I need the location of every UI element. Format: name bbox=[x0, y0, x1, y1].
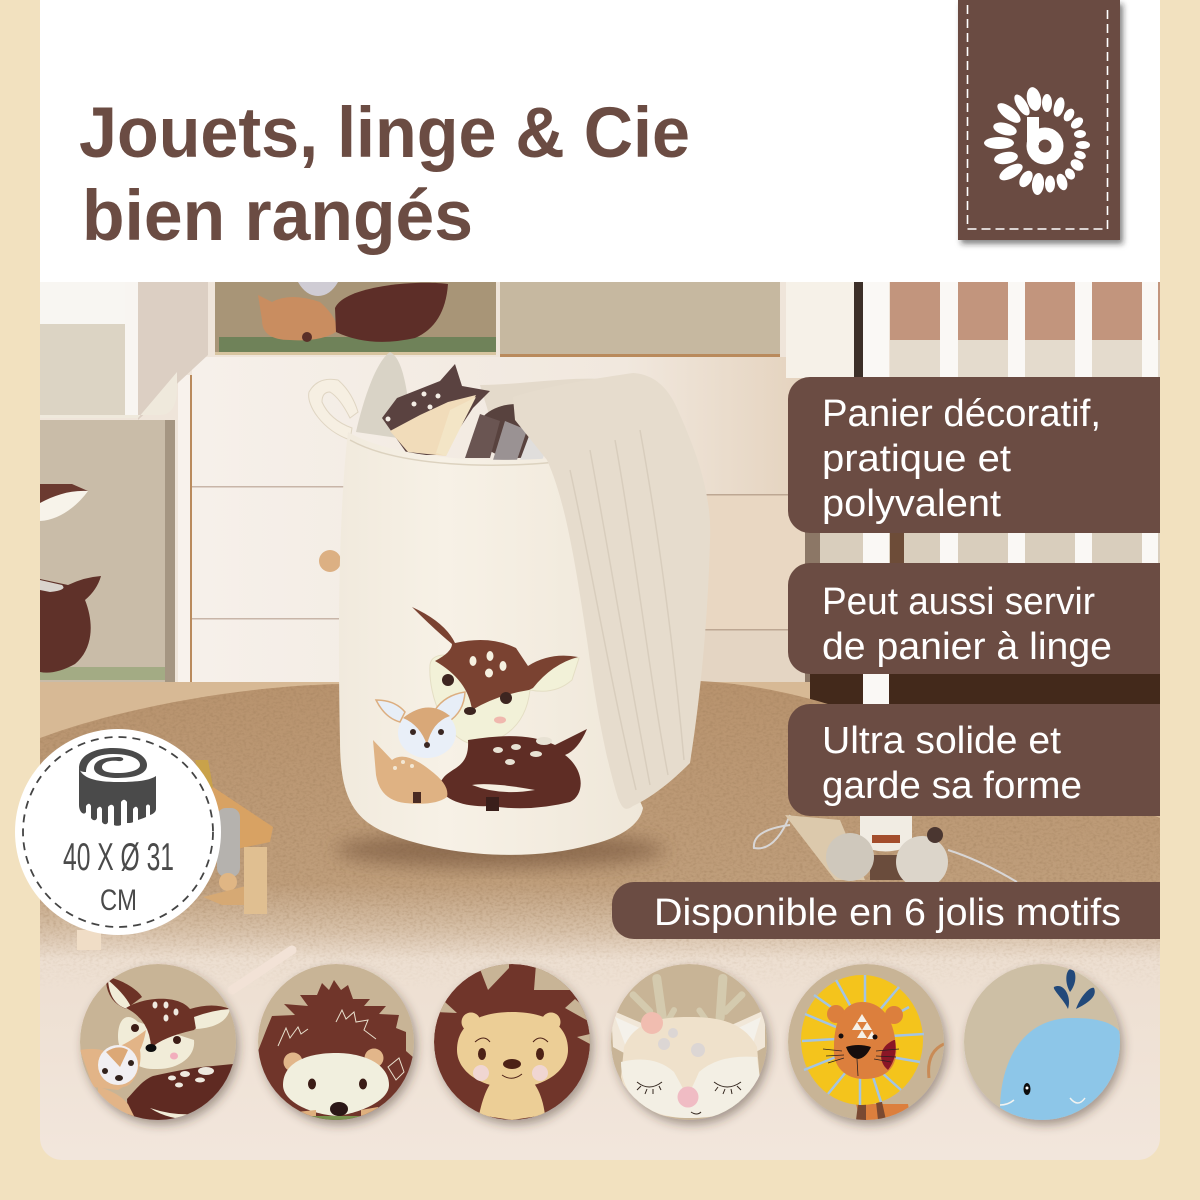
title: bien rangés bbox=[82, 177, 473, 256]
top fabric box left bbox=[215, 282, 496, 355]
mother deer body bbox=[440, 729, 587, 808]
medallion 2: hedgehog bbox=[258, 964, 414, 1120]
size text: CM bbox=[100, 884, 137, 917]
wall and dresser bbox=[40, 282, 890, 682]
basket floor shadow bbox=[335, 832, 665, 868]
rug bbox=[40, 681, 1160, 1160]
storage cube with deer bbox=[40, 420, 175, 682]
wooden floor bbox=[40, 682, 1160, 830]
icon: brand flower logo bbox=[984, 86, 1090, 195]
size badge bbox=[15, 729, 221, 935]
title bbox=[79, 94, 690, 256]
basket contents bbox=[356, 352, 594, 460]
callout: laundry basket bbox=[788, 563, 1160, 674]
basket bbox=[309, 352, 710, 855]
medallion 3: bear hedgehog bbox=[434, 964, 590, 1120]
size text: 40 X Ø 31 bbox=[63, 836, 174, 879]
crib bedding bbox=[810, 282, 1160, 706]
medallion 4: sleeping fawn bbox=[611, 964, 767, 1120]
mother deer ears and head bbox=[430, 655, 579, 745]
callout: laundry basket: Peut aussi servir bbox=[822, 581, 1095, 623]
muslin blanket bbox=[513, 373, 710, 809]
wooden toy bbox=[77, 760, 273, 950]
callout: sturdy: garde sa forme bbox=[822, 765, 1082, 807]
white post bbox=[786, 282, 854, 378]
callout: six motifs: Disponible en 6 jolis motifs bbox=[654, 892, 1121, 934]
callout: six motifs bbox=[612, 882, 1160, 939]
size text bbox=[63, 836, 174, 917]
title: Jouets, linge & Cie bbox=[79, 94, 690, 173]
callout: decorative basket: pratique et bbox=[822, 438, 1011, 480]
brand tag bbox=[958, 0, 1120, 240]
callout: decorative basket bbox=[788, 377, 1160, 533]
crib bars bbox=[863, 282, 1158, 704]
medallion 1: deer bbox=[80, 964, 236, 1120]
callout: decorative basket: Panier décoratif, bbox=[822, 393, 1101, 435]
basket body bbox=[339, 432, 643, 855]
drawer knobs bbox=[319, 550, 341, 572]
fawn body bbox=[373, 740, 447, 804]
top fabric box right bbox=[500, 282, 780, 357]
white shelf unit bbox=[40, 282, 208, 420]
callout: sturdy bbox=[788, 704, 1160, 816]
product photo bbox=[40, 282, 1160, 1160]
rug texture bbox=[40, 684, 1160, 990]
fawn head bbox=[376, 700, 405, 722]
pull-along wooden toy bbox=[754, 815, 1017, 888]
icon: measuring tape bbox=[79, 748, 156, 826]
wooden stick on rug bbox=[241, 946, 296, 979]
header panel bbox=[40, 0, 1160, 282]
medallion 5: lion bbox=[788, 964, 944, 1120]
basket handle bbox=[309, 379, 358, 440]
embroidered deer bbox=[373, 607, 587, 811]
callout: laundry basket: de panier à linge bbox=[822, 626, 1112, 668]
callout: decorative basket: polyvalent bbox=[822, 483, 1001, 525]
medallion 6: whale bbox=[964, 964, 1120, 1120]
callout: sturdy: Ultra solide et bbox=[822, 720, 1061, 762]
